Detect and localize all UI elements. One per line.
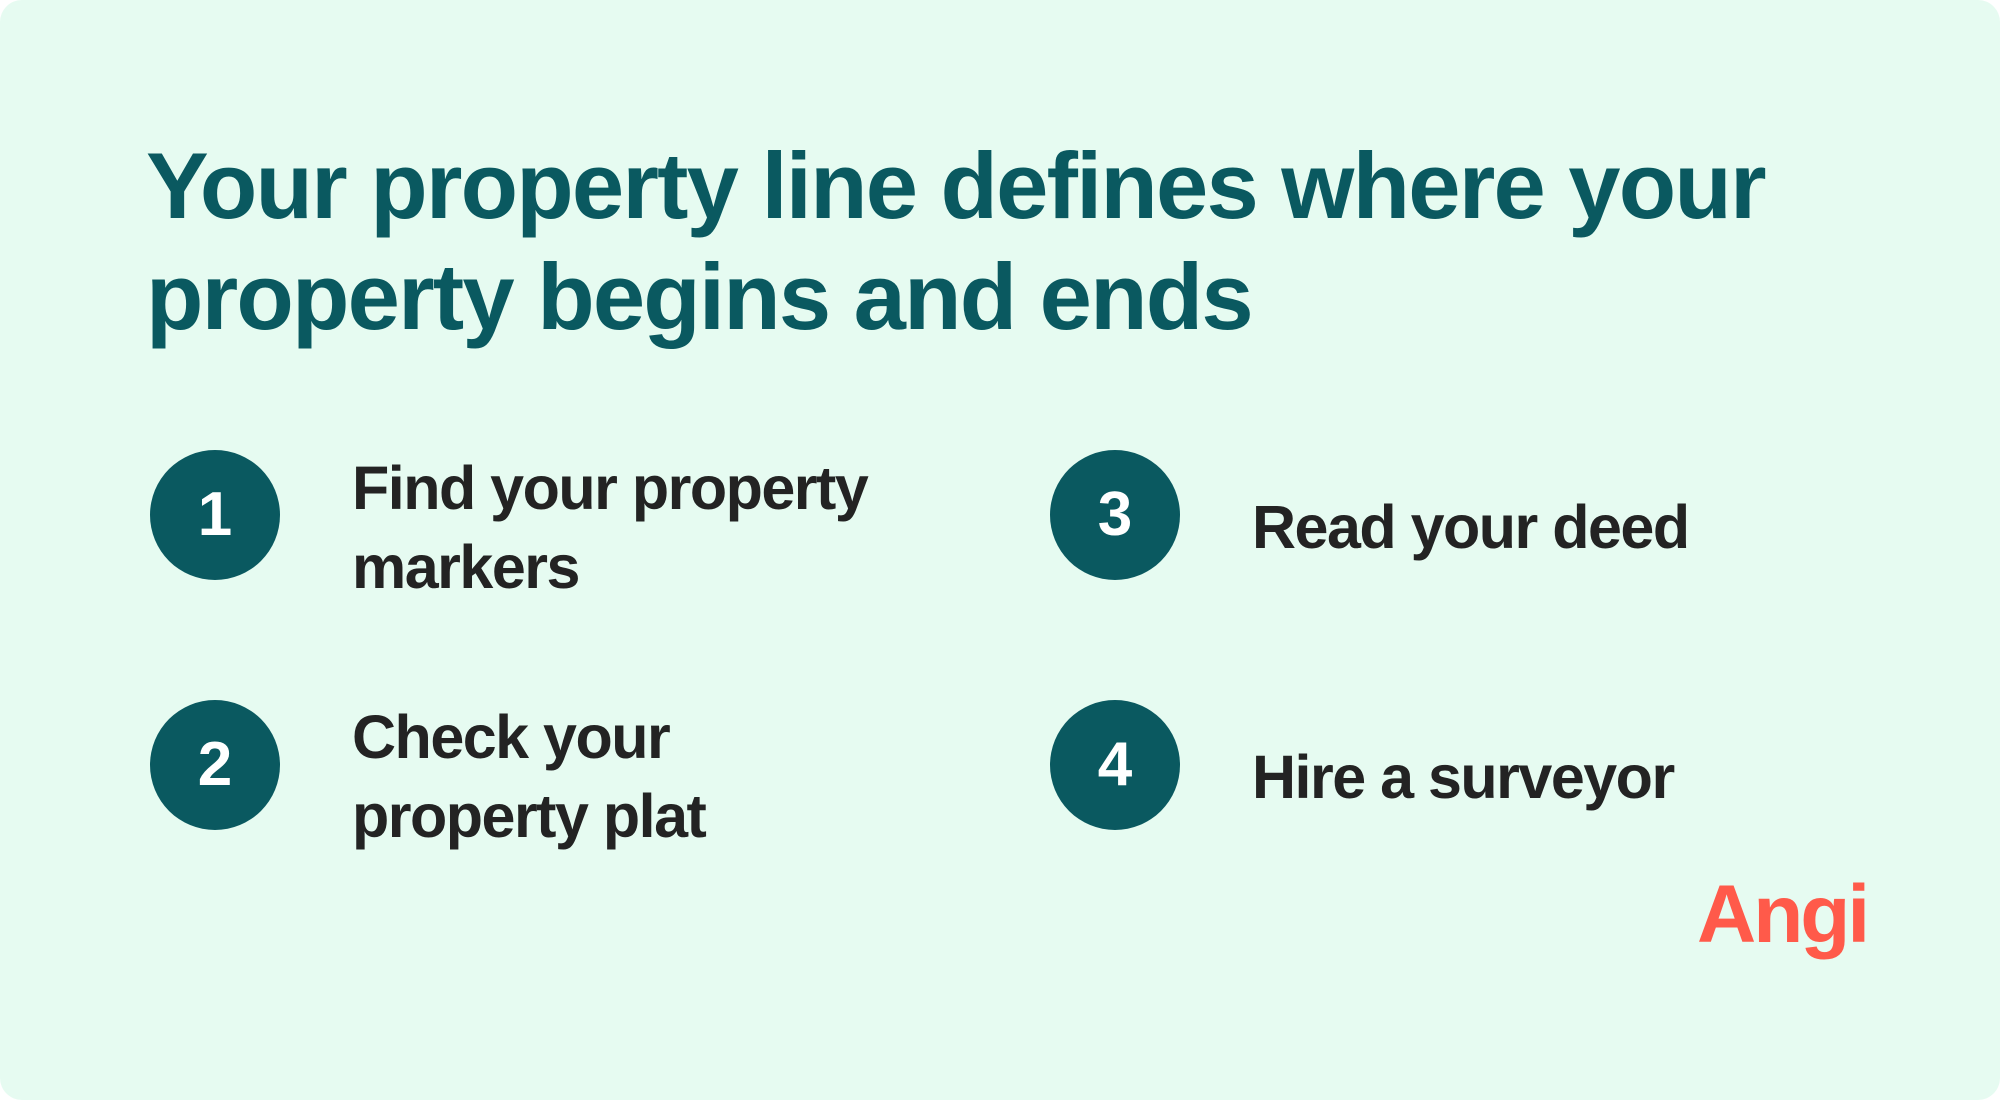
text 1: Find your property xyxy=(352,454,867,522)
circle 4: 4 xyxy=(1098,730,1132,799)
step 2 xyxy=(150,700,706,850)
circle 2: 2 xyxy=(198,730,232,799)
text 2: property plat xyxy=(352,782,705,850)
circle 3 xyxy=(1050,450,1180,580)
text 1: markers xyxy=(352,533,579,601)
logo: Angi: Angi xyxy=(1697,869,1867,960)
circle 1: 1 xyxy=(198,480,232,549)
text 1 xyxy=(352,454,868,601)
circle 3: 3 xyxy=(1098,480,1132,549)
step 4 xyxy=(1050,700,1674,830)
text 2 xyxy=(352,703,706,850)
title xyxy=(146,133,1766,349)
title: Your property line defines where your xyxy=(146,133,1765,238)
circle 4 xyxy=(1050,700,1180,830)
text 2: Check your xyxy=(352,703,669,771)
circle 1 xyxy=(150,450,280,580)
text 4: Hire a surveyor xyxy=(1252,743,1674,811)
title: property begins and ends xyxy=(146,244,1252,349)
step 1 xyxy=(150,450,868,601)
text 3: Read your deed xyxy=(1252,493,1689,561)
step 3 xyxy=(1050,450,1689,580)
circle 2 xyxy=(150,700,280,830)
